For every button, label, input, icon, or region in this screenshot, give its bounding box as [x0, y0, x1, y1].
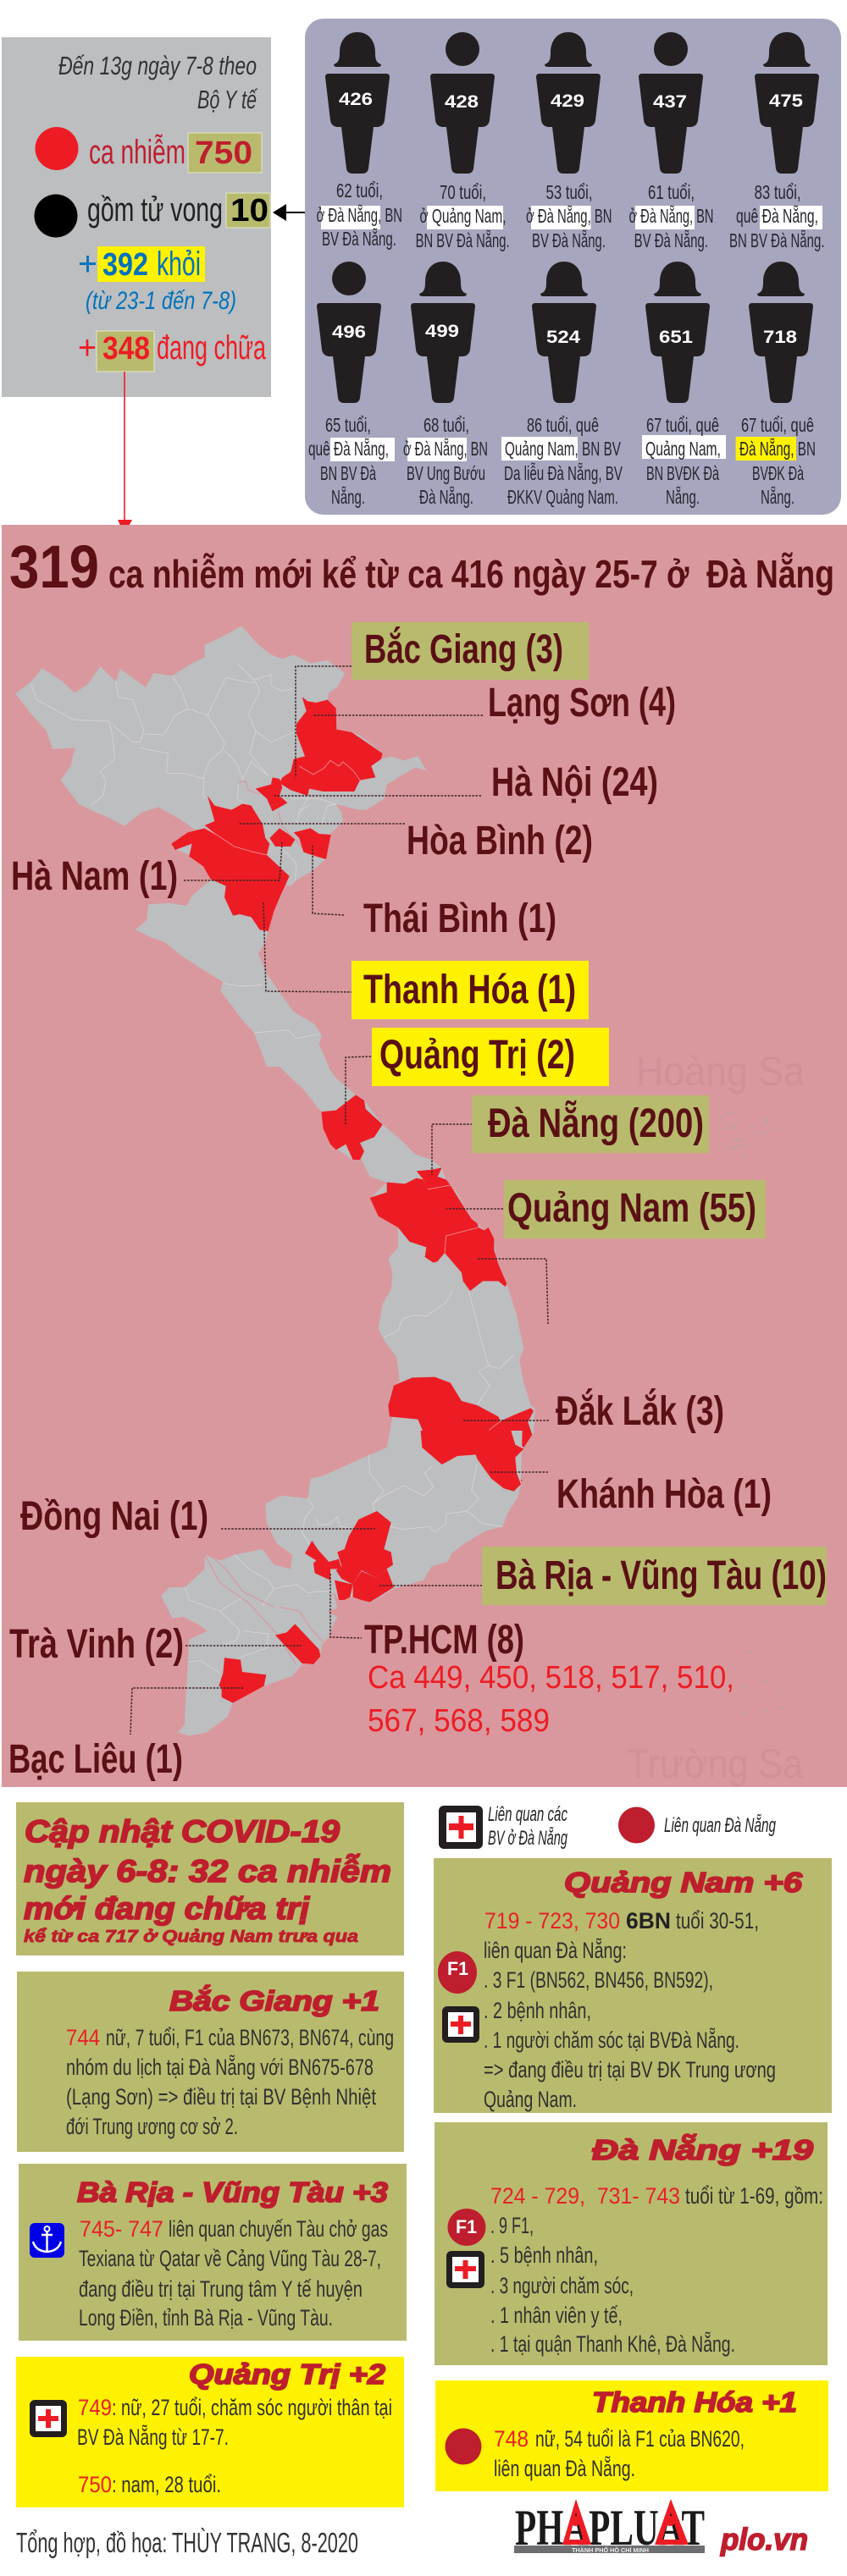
- label: Quảng Trị: Quảng Trị (2): [379, 1033, 575, 1078]
- stat: 348 in treatment: 348: [102, 331, 150, 367]
- icon: hospital: [446, 2251, 484, 2288]
- stat: 348 in treatment: [78, 329, 267, 372]
- label: Lạng Sơn: Lạng Sơn (4): [488, 681, 676, 725]
- patient 428: ở Quảng Nam,: [420, 205, 507, 227]
- panel: Bà Rịa - Vũng Tàu +3: đang điều trị tại Trung tâm Y tế huyện: [79, 2276, 363, 2302]
- logo: Pháp Luật: THÀNH PHỐ HỒ CHÍ MINH: [572, 2546, 649, 2554]
- label: Đà Nẵng: [472, 1095, 709, 1153]
- logo: Pháp Luật: [514, 2499, 705, 2556]
- panel: update headline: [16, 1802, 404, 1955]
- panel: Bắc Giang +1: [17, 1972, 404, 2152]
- panel: update headline: mới đang chữa trị: [24, 1891, 310, 1926]
- patient 651: 67 tuổi, quê: [646, 414, 719, 436]
- patient 651: [642, 262, 726, 508]
- patient 428: [416, 32, 510, 251]
- panel: national totals: [2, 37, 271, 397]
- patient 437: 437: [653, 92, 687, 112]
- patient 428: 428: [445, 92, 479, 112]
- label: Đắk Lắk: Đắk Lắk (3): [556, 1387, 724, 1434]
- patient 426: 426: [339, 90, 373, 109]
- patient 437: 61 tuổi,: [648, 181, 695, 203]
- text: source date: Đến 13g ngày 7-8 theo: [58, 51, 257, 80]
- panel: Đà Nẵng +19: . 1 nhân viên y tế,: [490, 2303, 623, 2328]
- legend: Liên quan các: [488, 1803, 567, 1826]
- logo: plo.vn: plo.vn: [720, 2522, 808, 2557]
- patient 429: BV Đà Nẵng.: [532, 229, 606, 251]
- label: Hòa Bình: Hòa Bình (2): [407, 819, 593, 863]
- icon: F1 badge: F1: [447, 1958, 468, 1979]
- icon: Đà Nẵng dot legend: [618, 1807, 655, 1844]
- panel: Thanh Hóa +1: [435, 2380, 828, 2491]
- legend: Liên quan Đà Nẵng: [664, 1813, 776, 1837]
- patient 475: [729, 32, 825, 251]
- panel: Đà Nẵng +19: 724 - 729, 731- 743: [490, 2183, 680, 2209]
- stat: 392 recovered: +: [78, 245, 97, 283]
- panel: Thanh Hóa +1: nữ, 54 tuổi là F1 của BN620,: [535, 2426, 745, 2452]
- patient 437: ở Đà Nẵng, BN: [628, 204, 713, 227]
- icon: F1 badge: [438, 1951, 477, 1994]
- stat: 10 deaths: 10: [230, 193, 268, 229]
- patient 524: 524: [546, 328, 580, 347]
- leader lines: [130, 666, 550, 1735]
- panel: Quảng Nam +6: . 3 F1 (BN562, BN456, BN592),: [484, 1967, 713, 1993]
- panel: Bắc Giang +1: (Lạng Sơn) => điều trị tại BV Bệnh Nhiệt: [66, 2084, 376, 2110]
- legend: BV ở Đà Nẵng: [488, 1826, 567, 1850]
- panel: Bà Rịa - Vũng Tàu +3: [19, 2164, 407, 2341]
- panel: Bắc Giang +1: 744: [66, 2025, 100, 2050]
- title: 319 new cases: [9, 534, 834, 601]
- label: Bắc Giang: [352, 622, 589, 680]
- panel: Thanh Hóa +1: liên quan Đà Nẵng.: [494, 2455, 635, 2481]
- text: TP.HCM case list: [368, 1660, 734, 1739]
- icon: Đà Nẵng dot: [446, 2428, 481, 2465]
- patient 651: 651: [659, 328, 693, 347]
- label: Bạc Liêu: Bạc Liêu (1): [8, 1737, 183, 1782]
- patient 496: 65 tuổi,: [325, 414, 371, 436]
- patient 718: BVĐK Đà: [752, 462, 804, 484]
- icon: hospital: [442, 2006, 479, 2043]
- patient 499: Đà Nẵng.: [419, 485, 473, 508]
- stat: 750 infected: 750: [195, 135, 252, 171]
- patient 429: 53 tuổi,: [545, 181, 593, 203]
- panel: Đà Nẵng +19: . 3 người chăm sóc,: [490, 2273, 634, 2298]
- icon: anchor: [30, 2223, 64, 2258]
- panel: Quảng Trị +2: 750: [78, 2472, 112, 2497]
- panel: Quảng Trị +2: 749: [78, 2395, 112, 2420]
- patient 429: ở Đà Nẵng, BN: [526, 204, 612, 227]
- patient 475: 475: [769, 91, 803, 111]
- label: Trà Vinh: Trà Vinh (2): [9, 1622, 184, 1667]
- patient 496: quê Đà Nẵng,: [308, 437, 389, 460]
- label: Đà Nẵng: Đà Nẵng (200): [488, 1100, 704, 1146]
- arrow: deaths to patient list: [273, 204, 316, 221]
- panel: Quảng Trị +2: Quảng Trị +2: [189, 2358, 386, 2390]
- patient 428: BN BV Đà Nẵng.: [416, 229, 510, 251]
- panel: Bà Rịa - Vũng Tàu +3: liên quan chuyến Tàu chở gas: [169, 2216, 388, 2242]
- patient 426: 62 tuổi,: [336, 179, 383, 201]
- panel: Quảng Nam +6: Quảng Nam.: [484, 2087, 577, 2112]
- panel: Quảng Nam +6: . 2 bệnh nhân,: [484, 1998, 591, 2023]
- panel: Quảng Nam +6: 6BN: [626, 1908, 671, 1933]
- text: TP.HCM case list: Ca 449, 450, 518, 517, 510,: [368, 1660, 734, 1696]
- text: infected label: ca nhiễm: [89, 133, 185, 171]
- patient 428: 70 tuổi,: [440, 181, 486, 203]
- stat: 392 recovered: [78, 245, 205, 283]
- panel: Quảng Nam +6: 719 - 723, 730: [484, 1908, 620, 1933]
- patient 499: BV Ung Bướu: [407, 462, 485, 484]
- text: Trường Sa: Trường Sa: [627, 1742, 803, 1787]
- patient 496: Nẵng.: [331, 485, 365, 508]
- text: recovered date range: (từ 23-1 đến 7-8): [86, 287, 236, 315]
- panel: Bà Rịa - Vũng Tàu +3: Long Điền, tỉnh Bà Rịa - Vũng Tàu.: [79, 2305, 333, 2331]
- patient 651: BN BVĐK Đà: [646, 462, 719, 484]
- text: credit: Tổng hợp, đồ họa: THÙY TRANG, 8-2020: [16, 2527, 358, 2558]
- stat: 348 in treatment: đang chữa: [157, 329, 267, 367]
- patient 426: [317, 32, 402, 250]
- logo: Pháp Luật: PHAPLUAT: [515, 2500, 705, 2556]
- panel: Bắc Giang +1: đới Trung ương cơ sở 2.: [66, 2114, 238, 2139]
- stat: 348 in treatment: +: [78, 329, 97, 367]
- icon: hospital: [30, 2400, 67, 2437]
- panel: Bà Rịa - Vũng Tàu +3: Bà Rịa - Vũng Tàu +3: [77, 2176, 388, 2208]
- label: Thái Bình: Thái Bình (1): [363, 896, 556, 941]
- title: 319 new cases: 319: [9, 534, 99, 601]
- icon: red dot: [36, 127, 78, 170]
- icon: hospital legend: [439, 1806, 483, 1849]
- patient 499: [403, 262, 488, 508]
- panel: Bắc Giang +1: nữ, 7 tuổi, F1 của BN673, BN674, cùng: [106, 2025, 394, 2050]
- panel: Quảng Nam +6: . 1 người chăm sóc tại BVĐà Nẵng.: [484, 2027, 739, 2053]
- panel: map of new cases: [2, 525, 847, 1787]
- panel: Thanh Hóa +1: 748: [494, 2426, 529, 2452]
- panel: update headline: ngày 6-8: 32 ca nhiễm: [24, 1854, 391, 1889]
- panel: Đà Nẵng +19: . 1 tại quận Thanh Khê, Đà Nẵng.: [490, 2331, 735, 2357]
- label: Quảng Nam: [504, 1180, 766, 1238]
- patient 496: BN BV Đà: [320, 462, 376, 484]
- panel: Đà Nẵng +19: . 5 bệnh nhân,: [490, 2242, 598, 2268]
- text: source date: [58, 51, 258, 114]
- icon: F1 badge: [447, 2209, 486, 2246]
- patient 429: 429: [551, 91, 584, 111]
- patient 651: Quảng Nam,: [645, 438, 721, 460]
- panel: Bà Rịa - Vũng Tàu +3: 745- 747: [80, 2216, 163, 2242]
- panel: update headline: kể từ ca 717 ở Quảng Nam trưa qua: [24, 1928, 358, 1946]
- arrow: treatment to map: [118, 372, 132, 534]
- map: central Vietnam: [257, 1041, 535, 1481]
- stat: 392 recovered: khỏi: [157, 245, 201, 283]
- stat: 750 infected: [188, 133, 262, 173]
- panel: Bà Rịa - Vũng Tàu +3: Texiana từ Qatar về Cảng Vũng Tàu 28-7,: [79, 2246, 381, 2271]
- patient 426: ở Đà Nẵng, BN: [317, 203, 402, 226]
- label: Quảng Nam: Quảng Nam (55): [507, 1186, 756, 1231]
- label: Đồng Nai: Đồng Nai (1): [20, 1494, 208, 1539]
- patient 429: [526, 32, 612, 251]
- patient 718: 67 tuổi, quê: [741, 414, 814, 436]
- patient 496: 496: [332, 323, 366, 342]
- panel: Đà Nẵng +19: . 9 F1,: [490, 2213, 534, 2238]
- icon: black dot: [34, 195, 78, 237]
- panel: update headline: Cập nhật COVID-19: [25, 1814, 340, 1849]
- patient 499: 499: [425, 322, 459, 341]
- patient 524: 86 tuổi, quê: [527, 414, 599, 436]
- map: southern Vietnam: [161, 1431, 523, 1736]
- panel: Quảng Trị +2: : nam, 28 tuổi.: [112, 2472, 221, 2497]
- patient 718: Nẵng.: [761, 485, 794, 508]
- patient 496: [308, 262, 395, 508]
- panel: deceased patients: [305, 19, 841, 515]
- patient 718: [736, 262, 816, 508]
- label: Hà Nội: Hà Nội (24): [491, 760, 658, 805]
- panel: Thanh Hóa +1: Thanh Hóa +1: [592, 2386, 797, 2418]
- patient 718: 718: [763, 328, 797, 347]
- legend: [439, 1803, 776, 1850]
- panel: Bắc Giang +1: Bắc Giang +1: [169, 1985, 379, 2016]
- panel: Quảng Trị +2: : nữ, 27 tuổi, chăm sóc người thân tại: [112, 2395, 392, 2420]
- panel: Đà Nẵng +19: [435, 2122, 828, 2365]
- panel: Quảng Nam +6: Quảng Nam +6: [564, 1867, 803, 1898]
- label: Thanh Hóa: [352, 961, 589, 1019]
- text: deaths label: gồm tử vong: [87, 191, 223, 229]
- icon: Hoàng Sa islands: [722, 1113, 783, 1156]
- panel: Bắc Giang +1: nhóm du lịch tại Đà Nẵng với BN675-678: [66, 2054, 374, 2080]
- icon: Trường Sa islands: [742, 1652, 785, 1729]
- panel: Quảng Trị +2: [16, 2357, 404, 2507]
- patient 524: ĐKKV Quảng Nam.: [507, 486, 618, 508]
- map: northern Vietnam: [15, 626, 426, 1067]
- patient 499: 68 tuổi,: [424, 414, 469, 436]
- label: Bắc Giang: Bắc Giang (3): [364, 626, 563, 672]
- text: source date: Bộ Y tế: [197, 85, 258, 114]
- label: Hà Nam: Hà Nam (1): [11, 854, 178, 899]
- panel: Đà Nẵng +19: Đà Nẵng +19: [592, 2134, 814, 2165]
- patient 524: Quảng Nam, BN BV: [505, 438, 621, 460]
- patient 499: ở Đà Nẵng, BN: [403, 437, 488, 460]
- label: TP.HCM: TP.HCM (8): [364, 1618, 524, 1663]
- icon: F1 badge: F1: [456, 2216, 477, 2237]
- panel: Quảng Nam +6: liên quan Đà Nẵng:: [484, 1937, 627, 1963]
- stat: 392 recovered: 392: [102, 247, 148, 283]
- label: Thanh Hóa: Thanh Hóa (1): [363, 968, 576, 1012]
- patient 651: Nẵng.: [666, 485, 700, 508]
- patient 475: 83 tuổi,: [755, 181, 801, 203]
- patient 524: [501, 262, 623, 508]
- patient 426: BV Đà Nẵng.: [322, 227, 396, 250]
- label: Quảng Trị: [372, 1028, 609, 1086]
- panel: Quảng Nam +6: tuổi 30-51,: [676, 1908, 759, 1933]
- label: Khánh Hòa: Khánh Hòa (1): [556, 1472, 772, 1517]
- panel: Quảng Trị +2: BV Đà Nẵng từ 17-7.: [77, 2424, 229, 2450]
- text: Hoàng Sa: Hoàng Sa: [636, 1050, 805, 1095]
- patient 524: Da liễu Đà Nẵng, BV: [504, 461, 623, 484]
- patient 437: [628, 32, 713, 251]
- patient 437: BV Đà Nẵng.: [634, 229, 708, 251]
- panel: Quảng Nam +6: [434, 1858, 832, 2113]
- text: TP.HCM case list: 567, 568, 589: [368, 1703, 550, 1739]
